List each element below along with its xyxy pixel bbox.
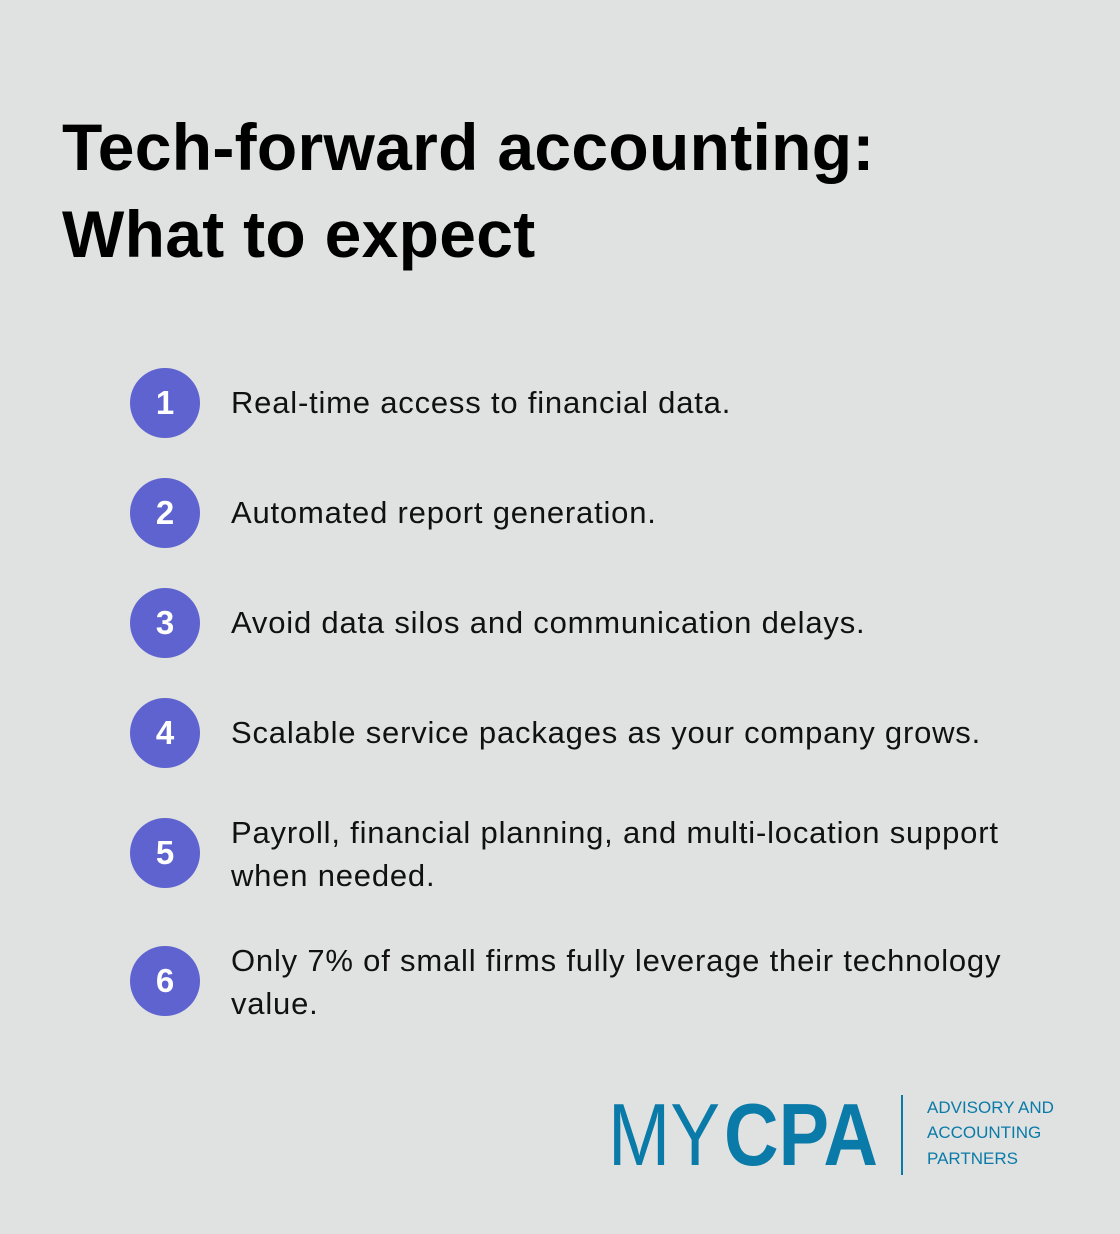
badge 5: [130, 818, 200, 888]
logo tagline: [927, 1098, 1054, 1168]
text 3: Avoid data silos and communication delays.: [231, 605, 865, 640]
logo wordmark: [608, 1085, 878, 1184]
item 3: [130, 588, 865, 658]
logo tagline: ACCOUNTING: [927, 1123, 1041, 1142]
text 5: [231, 815, 999, 893]
title: [62, 110, 875, 271]
logo tagline: ADVISORY AND: [927, 1098, 1054, 1117]
text 2: Automated report generation.: [231, 495, 657, 530]
badge 3: 3: [156, 604, 174, 641]
item 1: [130, 368, 731, 438]
logo tagline: PARTNERS: [927, 1149, 1018, 1168]
text 4: Scalable service packages as your company grows.: [231, 715, 981, 750]
item 5: [130, 815, 999, 893]
badge 4: [130, 698, 200, 768]
text 6: value.: [231, 986, 319, 1021]
badge 6: [130, 946, 200, 1016]
badge 1: 1: [156, 384, 174, 421]
text 5: when needed.: [231, 858, 435, 893]
text 6: [231, 943, 1001, 1021]
badge 2: [130, 478, 200, 548]
badge 3: [130, 588, 200, 658]
text 6: Only 7% of small firms fully leverage their technology: [231, 943, 1001, 978]
badge 6: 6: [156, 962, 174, 999]
item 2: [130, 478, 657, 548]
text 1: Real-time access to financial data.: [231, 385, 731, 420]
badge 5: 5: [156, 834, 174, 871]
text 5: Payroll, financial planning, and multi-location support: [231, 815, 999, 850]
badge 1: [130, 368, 200, 438]
badge 2: 2: [156, 494, 174, 531]
item 4: [130, 698, 981, 768]
title: Tech-forward accounting:: [62, 110, 875, 184]
logo wordmark: MY: [608, 1085, 720, 1184]
badge 4: 4: [156, 714, 174, 751]
item 6: [130, 943, 1001, 1021]
logo: [608, 1085, 1054, 1184]
title: What to expect: [62, 197, 536, 271]
logo wordmark: CPA: [724, 1085, 878, 1184]
